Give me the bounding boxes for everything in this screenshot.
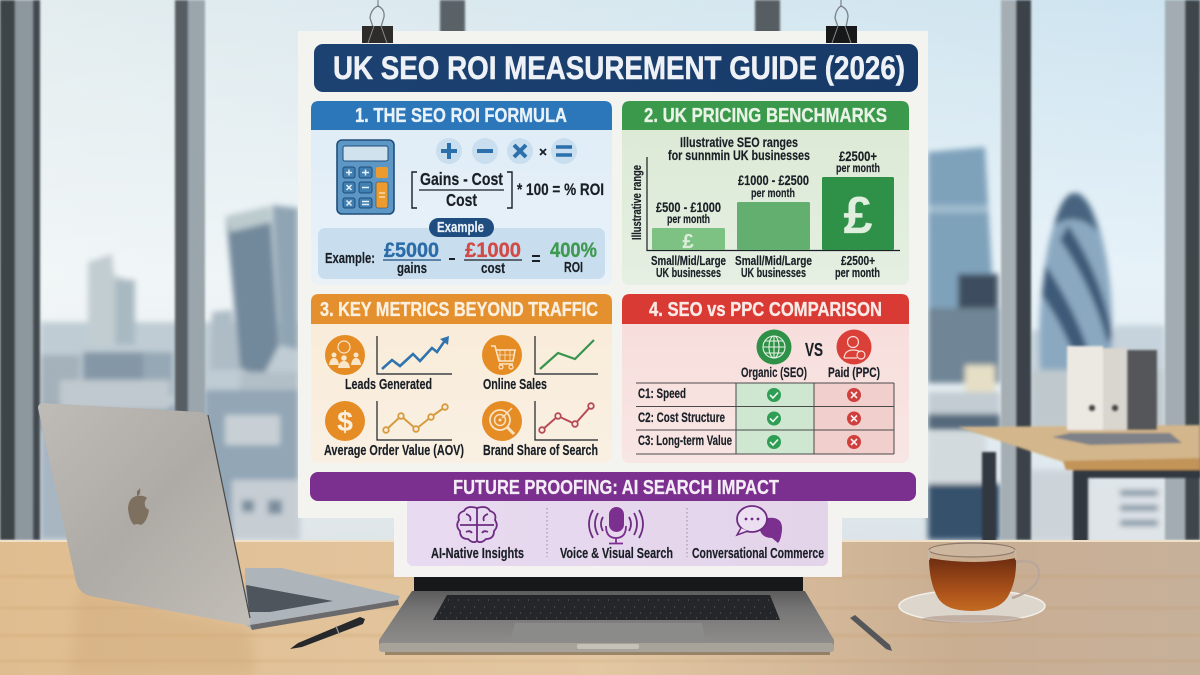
comparison table <box>636 383 894 454</box>
heading: formula: 1. THE SEO ROI FORMULA <box>355 104 567 127</box>
comparison table: C1: Speed <box>638 385 686 401</box>
formula: * 100 = % ROI <box>517 180 604 199</box>
binder clip left <box>362 0 393 43</box>
banner: future proofing <box>310 472 916 501</box>
icon: dollar <box>325 401 365 441</box>
skyline: city buildings <box>40 147 1166 540</box>
wooden desk <box>0 540 1200 675</box>
icon: target search <box>482 401 522 441</box>
cup of tea on saucer <box>899 543 1045 623</box>
comparison table: C2: Cost Structure <box>638 409 725 425</box>
example box: gains <box>397 261 427 277</box>
icon: paid user <box>836 330 872 364</box>
example box: £1000 <box>465 239 521 262</box>
title banner: UK SEO ROI MEASUREMENT GUIDE (2026) <box>333 50 905 86</box>
chart subtitle: for sunnmin UK businesses <box>668 147 810 163</box>
back desk with binders <box>958 346 1200 542</box>
bar chart: pricing ranges: Small/Mid/Large <box>735 253 812 268</box>
bar chart: pricing ranges: UK businesses <box>741 265 806 280</box>
example box: £5000 <box>384 239 439 262</box>
chart: gold line with markers <box>377 401 452 440</box>
bar chart: pricing ranges: UK businesses <box>656 265 721 280</box>
example box: 400% <box>550 239 597 262</box>
heading: comparison: 4. SEO vs PPC COMPARISON <box>649 298 882 321</box>
icon: chat bubbles <box>737 506 782 543</box>
metric: leads generated: Leads Generated <box>345 377 432 393</box>
heading: pricing: 2. UK PRICING BENCHMARKS <box>644 104 887 127</box>
icon: microphone with sound waves <box>589 507 643 544</box>
metric: online sales: Online Sales <box>483 377 547 393</box>
bar chart: pricing ranges: per month <box>751 186 795 200</box>
icon labels: Conversational Commerce <box>692 546 824 562</box>
example box: ROI <box>564 260 583 276</box>
bar chart: pricing ranges: Small/Mid/Large <box>651 253 726 268</box>
vs label: VS <box>805 340 823 360</box>
bar chart: pricing ranges: per month <box>667 212 710 226</box>
bar chart: pricing ranges: £2500+ <box>841 253 875 268</box>
bar chart: pricing ranges: £2500+ <box>839 148 877 164</box>
chart subtitle <box>668 134 810 163</box>
formula: Gains - Cost <box>420 169 503 189</box>
icon: people <box>325 335 365 375</box>
formula <box>412 169 604 210</box>
comparison table: C3: Long-term Value <box>638 432 732 448</box>
icon labels: Voice & Visual Search <box>560 546 673 562</box>
banner: future proofing: FUTURE PROOFING: AI SEARCH IMPACT <box>453 476 779 499</box>
example box <box>318 218 605 279</box>
window frames <box>0 0 1200 540</box>
metric: online sales <box>482 335 598 393</box>
formula: Cost <box>446 190 477 210</box>
binder clip right <box>826 0 857 43</box>
icon: shopping cart <box>482 335 522 375</box>
pen on desk, left <box>290 617 365 649</box>
panel: 4. SEO vs PPC comparison <box>622 294 909 463</box>
icon row: math operators <box>436 138 577 164</box>
icon: laptop logo <box>128 488 149 525</box>
example pill: Example <box>437 220 484 236</box>
metric: brand share of search: Brand Share of Search <box>483 443 598 459</box>
metric: brand share of search <box>482 401 598 459</box>
metric: leads generated <box>325 335 452 393</box>
icon labels <box>431 546 824 562</box>
icons: red crosses <box>847 388 861 449</box>
bar chart: pricing ranges: £ <box>682 231 694 253</box>
chart subtitle: Illustrative SEO ranges <box>680 134 798 150</box>
column labels: Paid (PPC) <box>828 364 880 380</box>
icon: calculator <box>337 140 394 214</box>
chart: red line with markers <box>535 401 598 440</box>
bar chart: pricing ranges: £500 - £1000 <box>656 199 721 215</box>
heading: metrics: 3. KEY METRICS BEYOND TRAFFIC <box>320 298 598 321</box>
bar chart: pricing ranges: Illustrative range <box>629 165 644 240</box>
bar chart: pricing ranges: per month <box>836 161 880 175</box>
chart: green line <box>535 336 598 374</box>
metric: average order value: Average Order Value (AOV) <box>324 443 464 459</box>
panel: 3. key metrics beyond traffic <box>311 294 612 463</box>
metric: average order value <box>324 401 464 459</box>
laptop left, open away from viewer <box>38 403 400 649</box>
icon labels: AI-Native Insights <box>431 546 524 562</box>
bar chart: pricing ranges: £1000 - £2500 <box>738 172 809 188</box>
example box: cost <box>481 261 505 277</box>
icon: brain <box>457 507 497 542</box>
icon: dollar: $ <box>337 406 353 437</box>
poster sheet <box>298 31 928 577</box>
bar chart: pricing ranges: per month <box>835 265 880 280</box>
panel: future proofing AI search impact <box>310 472 916 566</box>
column labels <box>741 364 880 380</box>
example box: Example: <box>325 250 375 267</box>
laptop centre <box>379 577 834 655</box>
title banner <box>314 44 918 92</box>
panel: 2. UK pricing benchmarks <box>622 101 909 285</box>
panel: 1. the SEO ROI formula <box>311 101 612 285</box>
icons: green checks <box>767 388 781 449</box>
chart: rising blue line with arrow <box>377 336 452 374</box>
bar chart: pricing ranges: £ <box>844 187 873 245</box>
column labels: Organic (SEO) <box>741 364 807 380</box>
bar chart: pricing ranges <box>629 148 900 280</box>
pen on desk, right <box>850 615 892 651</box>
icon: globe organic <box>756 330 792 364</box>
